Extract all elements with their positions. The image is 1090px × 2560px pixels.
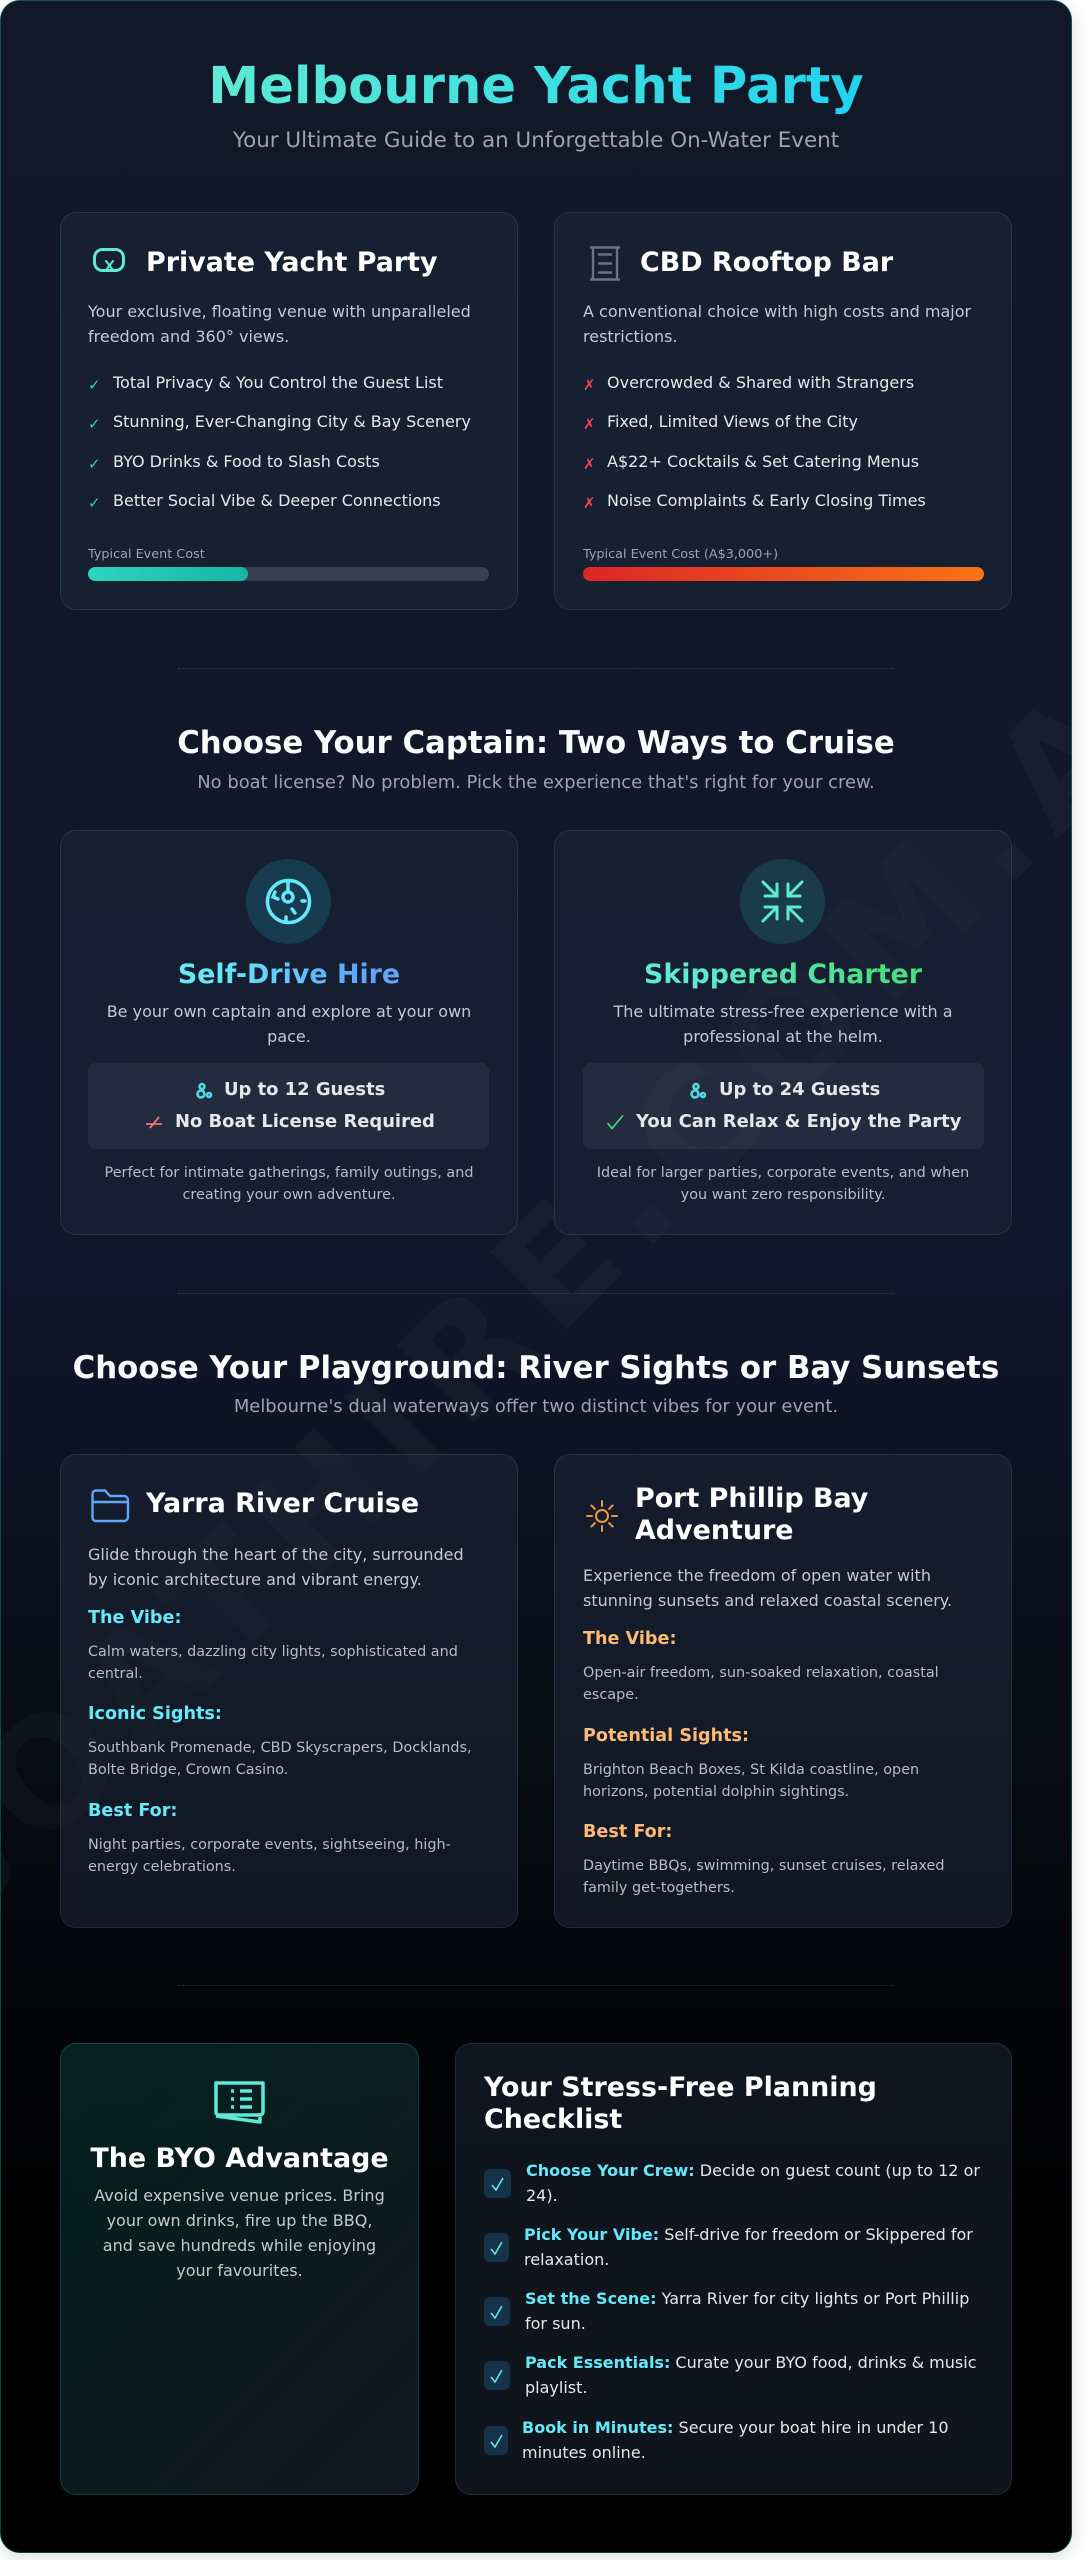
- cost label: Typical Event Cost (A$3,000+): [583, 547, 778, 562]
- license text: No Boat License Required: [175, 1111, 435, 1132]
- potential sights: horizons, potential dolphin sightings.: [583, 1784, 849, 1800]
- description: your favourites.: [176, 2261, 303, 2280]
- vibe: The Vibe:: [88, 1608, 181, 1628]
- note: [597, 1165, 969, 1203]
- drawback list: ✗: [583, 455, 596, 473]
- description: [583, 1566, 952, 1610]
- description: Avoid expensive venue prices. Bring: [94, 2186, 385, 2205]
- panel: planning checklist: [455, 2043, 1012, 2495]
- icon: guests: [690, 1082, 706, 1099]
- heading: [635, 1483, 868, 1546]
- description: Glide through the heart of the city, surrounded: [88, 1545, 464, 1564]
- icon: building: [590, 246, 620, 281]
- heading: Port Phillip Bay: [635, 1483, 868, 1514]
- heading: Yarra River Cruise: [146, 1488, 419, 1519]
- checklist item: [484, 2418, 949, 2462]
- panel: port phillip bay adventure: [554, 1454, 1012, 1928]
- iconic sights: Southbank Promenade, CBD Skyscrapers, Docklands,: [88, 1740, 472, 1756]
- section subtitle: captain: No boat license? No problem. Pick the experience that's right for your crew.: [197, 772, 875, 793]
- checklist item: relaxation.: [524, 2250, 609, 2269]
- drawback list: Fixed, Limited Views of the City: [607, 412, 858, 431]
- benefit list: Total Privacy & You Control the Guest List: [113, 373, 443, 392]
- checklist item: for sun.: [525, 2314, 586, 2333]
- panel: private yacht party: [60, 212, 518, 610]
- title: Melbourne Yacht Party: [208, 56, 864, 116]
- icon: relax check: [607, 1115, 624, 1130]
- drawback list: [583, 373, 926, 512]
- drawback list: ✗: [583, 376, 596, 394]
- description: Your exclusive, floating venue with unparalleled: [88, 302, 471, 321]
- panel: yarra river cruise: [60, 1454, 518, 1928]
- checklist item: minutes online.: [522, 2443, 646, 2462]
- vibe: [583, 1629, 939, 1703]
- icon: guests: [196, 1082, 212, 1099]
- best for: family get-togethers.: [583, 1880, 735, 1896]
- benefit list: ✓: [88, 376, 101, 394]
- benefit list: BYO Drinks & Food to Slash Costs: [113, 452, 380, 471]
- iconic sights: Bolte Bridge, Crown Casino.: [88, 1762, 288, 1778]
- checklist item: [484, 2161, 980, 2205]
- description: professional at the helm.: [683, 1027, 883, 1046]
- feature box: [88, 1063, 489, 1149]
- section heading: captain: Choose Your Captain: Two Ways to Cruise: [177, 725, 895, 761]
- heading: [60, 958, 518, 992]
- checklist item: Book in Minutes: Secure your boat hire in under 10: [522, 2418, 949, 2437]
- benefit list: Better Social Vibe & Deeper Connections: [113, 491, 441, 510]
- note: [105, 1165, 473, 1203]
- panel: byo advantage: [60, 2043, 419, 2495]
- description: [88, 302, 471, 346]
- guests text: Up to 12 Guests: [224, 1079, 385, 1100]
- description: [88, 1545, 464, 1589]
- feature box: [583, 1063, 984, 1149]
- checklist item: Set the Scene: Yarra River for city lights or Port Phillip: [525, 2289, 969, 2308]
- cost label: Typical Event Cost: [88, 547, 205, 562]
- panel: cbd rooftop bar: [554, 212, 1012, 610]
- benefit list: ✓: [88, 455, 101, 473]
- description: Experience the freedom of open water with: [583, 1566, 931, 1585]
- heading: Your Stress-Free Planning: [484, 2072, 877, 2103]
- description: stunning sunsets and relaxed coastal scenery.: [583, 1591, 952, 1610]
- vibe: The Vibe:: [583, 1629, 676, 1649]
- note: Perfect for intimate gatherings, family outings, and: [105, 1165, 473, 1181]
- benefit list: Stunning, Ever-Changing City & Bay Scenery: [113, 412, 471, 431]
- potential sights: [583, 1726, 919, 1800]
- panel: skippered charter: [554, 830, 1012, 1235]
- iconic sights: Iconic Sights:: [88, 1704, 222, 1724]
- icon: folder: [91, 1489, 130, 1522]
- best for: Night parties, corporate events, sightseeing, high-: [88, 1837, 451, 1853]
- cost bar: [583, 567, 984, 581]
- icon: no license: [146, 1116, 162, 1129]
- vibe: escape.: [583, 1687, 639, 1703]
- drawback list: Overcrowded & Shared with Strangers: [607, 373, 914, 392]
- drawback list: ✗: [583, 415, 596, 433]
- heading: Self-Drive Hire: [178, 959, 400, 990]
- best for: Daytime BBQs, swimming, sunset cruises, relaxed: [583, 1858, 945, 1874]
- best for: [88, 1801, 451, 1875]
- drawback list: Noise Complaints & Early Closing Times: [607, 491, 926, 510]
- description: restrictions.: [583, 327, 678, 346]
- description: [107, 1002, 471, 1046]
- potential sights: Brighton Beach Boxes, St Kilda coastline, open: [583, 1762, 919, 1778]
- vibe: [88, 1608, 458, 1682]
- description: The ultimate stress-free experience with a: [613, 1002, 953, 1021]
- section subtitle: playground: Melbourne's dual waterways offer two distinct vibes for your event.: [234, 1396, 838, 1417]
- heading: Checklist: [484, 2104, 622, 2135]
- description: Be your own captain and explore at your own: [107, 1002, 471, 1021]
- heading: The BYO Advantage: [90, 2143, 389, 2174]
- checklist item: Pack Essentials: Curate your BYO food, drinks & music: [525, 2353, 976, 2372]
- description: and save hundreds while enjoying: [103, 2236, 376, 2255]
- checklist item: Choose Your Crew: Decide on guest count (up to 12 or: [526, 2161, 980, 2180]
- potential sights: Potential Sights:: [583, 1726, 749, 1746]
- subtitle: Your Ultimate Guide to an Unforgettable On-Water Event: [233, 128, 839, 153]
- best for: Best For:: [88, 1801, 177, 1821]
- note: you want zero responsibility.: [681, 1187, 885, 1203]
- benefit list: ✓: [88, 415, 101, 433]
- description: [94, 2186, 385, 2280]
- icon: arrows badge: [740, 859, 825, 944]
- checklist item: 24).: [526, 2186, 558, 2205]
- description: by iconic architecture and vibrant energy.: [88, 1570, 422, 1589]
- icon: sun: [586, 1500, 618, 1532]
- vibe: Open-air freedom, sun-soaked relaxation, coastal: [583, 1665, 939, 1681]
- icon: yacht: [93, 248, 125, 272]
- icon: menu: [214, 2081, 265, 2124]
- relax text: You Can Relax & Enjoy the Party: [636, 1111, 961, 1132]
- benefit list: [88, 373, 471, 512]
- panel: self-drive hire: [60, 830, 518, 1235]
- description: A conventional choice with high costs and major: [583, 302, 971, 321]
- best for: Best For:: [583, 1822, 672, 1842]
- checklist item: [484, 2225, 973, 2269]
- description: pace.: [267, 1027, 311, 1046]
- section heading: playground: Choose Your Playground: River Sights or Bay Sunsets: [73, 1350, 999, 1386]
- heading: Adventure: [635, 1515, 793, 1546]
- guests text: Up to 24 Guests: [719, 1079, 880, 1100]
- cost bar: [88, 567, 489, 581]
- description: freedom and 360° views.: [88, 327, 289, 346]
- vibe: central.: [88, 1666, 143, 1682]
- checklist item: [484, 2289, 969, 2333]
- checklist item: [484, 2353, 976, 2397]
- best for: [583, 1822, 945, 1896]
- best for: energy celebrations.: [88, 1859, 236, 1875]
- note: Ideal for larger parties, corporate events, and when: [597, 1165, 969, 1181]
- heading: Private Yacht Party: [146, 247, 438, 278]
- description: [613, 1002, 953, 1046]
- heading: Skippered Charter: [644, 959, 922, 990]
- description: [583, 302, 972, 346]
- heading: [554, 958, 1012, 992]
- iconic sights: [88, 1704, 472, 1778]
- note: creating your own adventure.: [182, 1187, 396, 1203]
- heading: CBD Rooftop Bar: [640, 247, 893, 278]
- vibe: Calm waters, dazzling city lights, sophisticated and: [88, 1644, 458, 1660]
- benefit list: ✓: [88, 494, 101, 512]
- title: [0, 54, 1072, 118]
- checklist item: Pick Your Vibe: Self-drive for freedom or Skippered for: [524, 2225, 973, 2244]
- description: your own drinks, fire up the BBQ,: [107, 2211, 372, 2230]
- heading: [484, 2072, 877, 2135]
- checklist item: playlist.: [525, 2378, 587, 2397]
- drawback list: A$22+ Cocktails & Set Catering Menus: [607, 452, 919, 471]
- drawback list: ✗: [583, 494, 596, 512]
- icon: compass badge: [246, 859, 331, 944]
